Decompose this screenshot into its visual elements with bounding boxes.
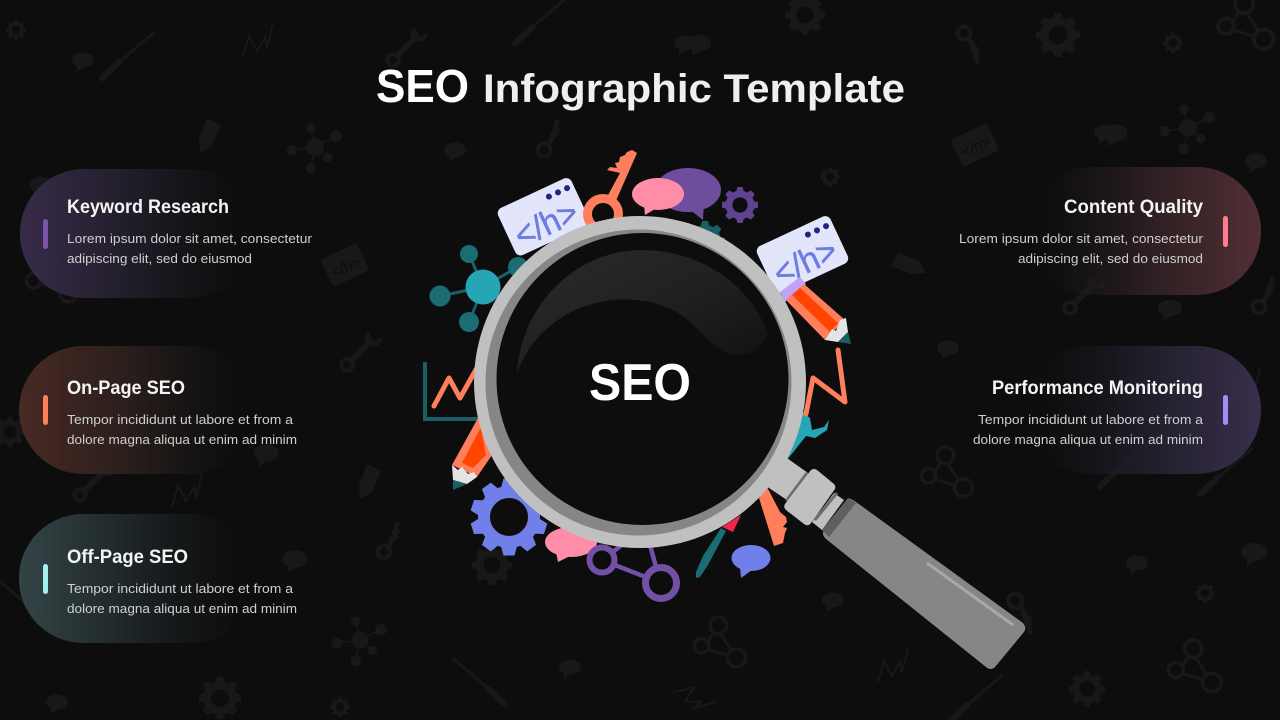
lens rings bbox=[474, 216, 806, 548]
icon: code window left: </h> bbox=[508, 193, 584, 255]
icon: small purple gear bbox=[722, 187, 758, 223]
icon: purple speech bubble bbox=[655, 168, 721, 220]
handle grip bbox=[822, 498, 1025, 669]
icon: purple network bbox=[590, 545, 676, 598]
panel: Off-Page SEO bbox=[19, 514, 297, 643]
panel: Content Quality: Content Quality bbox=[1064, 197, 1203, 218]
title: Infographic Template bbox=[483, 67, 905, 111]
icon: pencil left bbox=[452, 418, 492, 490]
icon: teal gear behind lens bbox=[685, 221, 725, 261]
icon: blue speech bubble bbox=[732, 545, 770, 578]
panel: Off-Page SEO: Off-Page SEO bbox=[67, 547, 188, 568]
panel: Content Quality: Lorem ipsum dolor sit amet, consectetur bbox=[959, 231, 1204, 246]
icon: line chart bbox=[425, 362, 480, 419]
panel: On-Page SEO: On-Page SEO bbox=[67, 378, 185, 399]
panel: On-Page SEO bbox=[19, 346, 297, 474]
handle neck and collar bbox=[766, 456, 844, 530]
SEO label: SEO bbox=[589, 354, 691, 412]
icon: orange zigzag bbox=[806, 350, 845, 414]
icon: key bottom bbox=[759, 487, 787, 546]
panel: Keyword Research bbox=[20, 169, 313, 298]
title bbox=[376, 60, 905, 112]
lens glare bbox=[517, 250, 768, 373]
panel: On-Page SEO: Tempor incididunt ut labore et from a bbox=[67, 412, 294, 427]
icon: screwdriver bbox=[696, 515, 741, 578]
background pattern of faint SEO icons: </h> bbox=[329, 253, 363, 281]
title: SEO bbox=[376, 60, 469, 112]
panel: Performance Monitoring: dolore magna aliqua ut enim ad minim bbox=[973, 432, 1203, 447]
icon: blue gear bbox=[470, 478, 548, 556]
panel: Performance Monitoring: Tempor incididunt ut labore et from a bbox=[978, 412, 1204, 427]
icon: key top bbox=[588, 150, 637, 230]
icon: code window right: </h> bbox=[767, 231, 843, 293]
panel: Content Quality: adipiscing elit, sed do eiusmod bbox=[1018, 251, 1203, 266]
panel: Keyword Research: Keyword Research bbox=[67, 197, 229, 218]
icon: pink bubble bottom bbox=[545, 527, 597, 562]
panel: Keyword Research: adipiscing elit, sed do eiusmod bbox=[67, 251, 252, 266]
panel: On-Page SEO: dolore magna aliqua ut enim ad minim bbox=[67, 432, 297, 447]
magnifying glass bbox=[474, 216, 1025, 669]
panel: Off-Page SEO: Tempor incididunt ut labore et from a bbox=[67, 581, 294, 596]
panel: Performance Monitoring bbox=[973, 346, 1261, 474]
icon: pink speech bubble bbox=[632, 178, 684, 215]
background pattern of faint SEO icons: </h> bbox=[959, 133, 993, 161]
panel: Off-Page SEO: dolore magna aliqua ut enim ad minim bbox=[67, 601, 297, 616]
icon: wrench teal bbox=[787, 412, 829, 460]
panel: Content Quality bbox=[959, 167, 1261, 295]
icon: teal network bbox=[430, 245, 528, 332]
panel: Keyword Research: Lorem ipsum dolor sit amet, consectetur bbox=[67, 231, 313, 246]
icon: code window right bbox=[755, 214, 851, 296]
icon: pencil right bbox=[780, 277, 851, 344]
icon: code window left bbox=[496, 176, 592, 258]
panel: Performance Monitoring: Performance Monitoring bbox=[992, 378, 1203, 399]
